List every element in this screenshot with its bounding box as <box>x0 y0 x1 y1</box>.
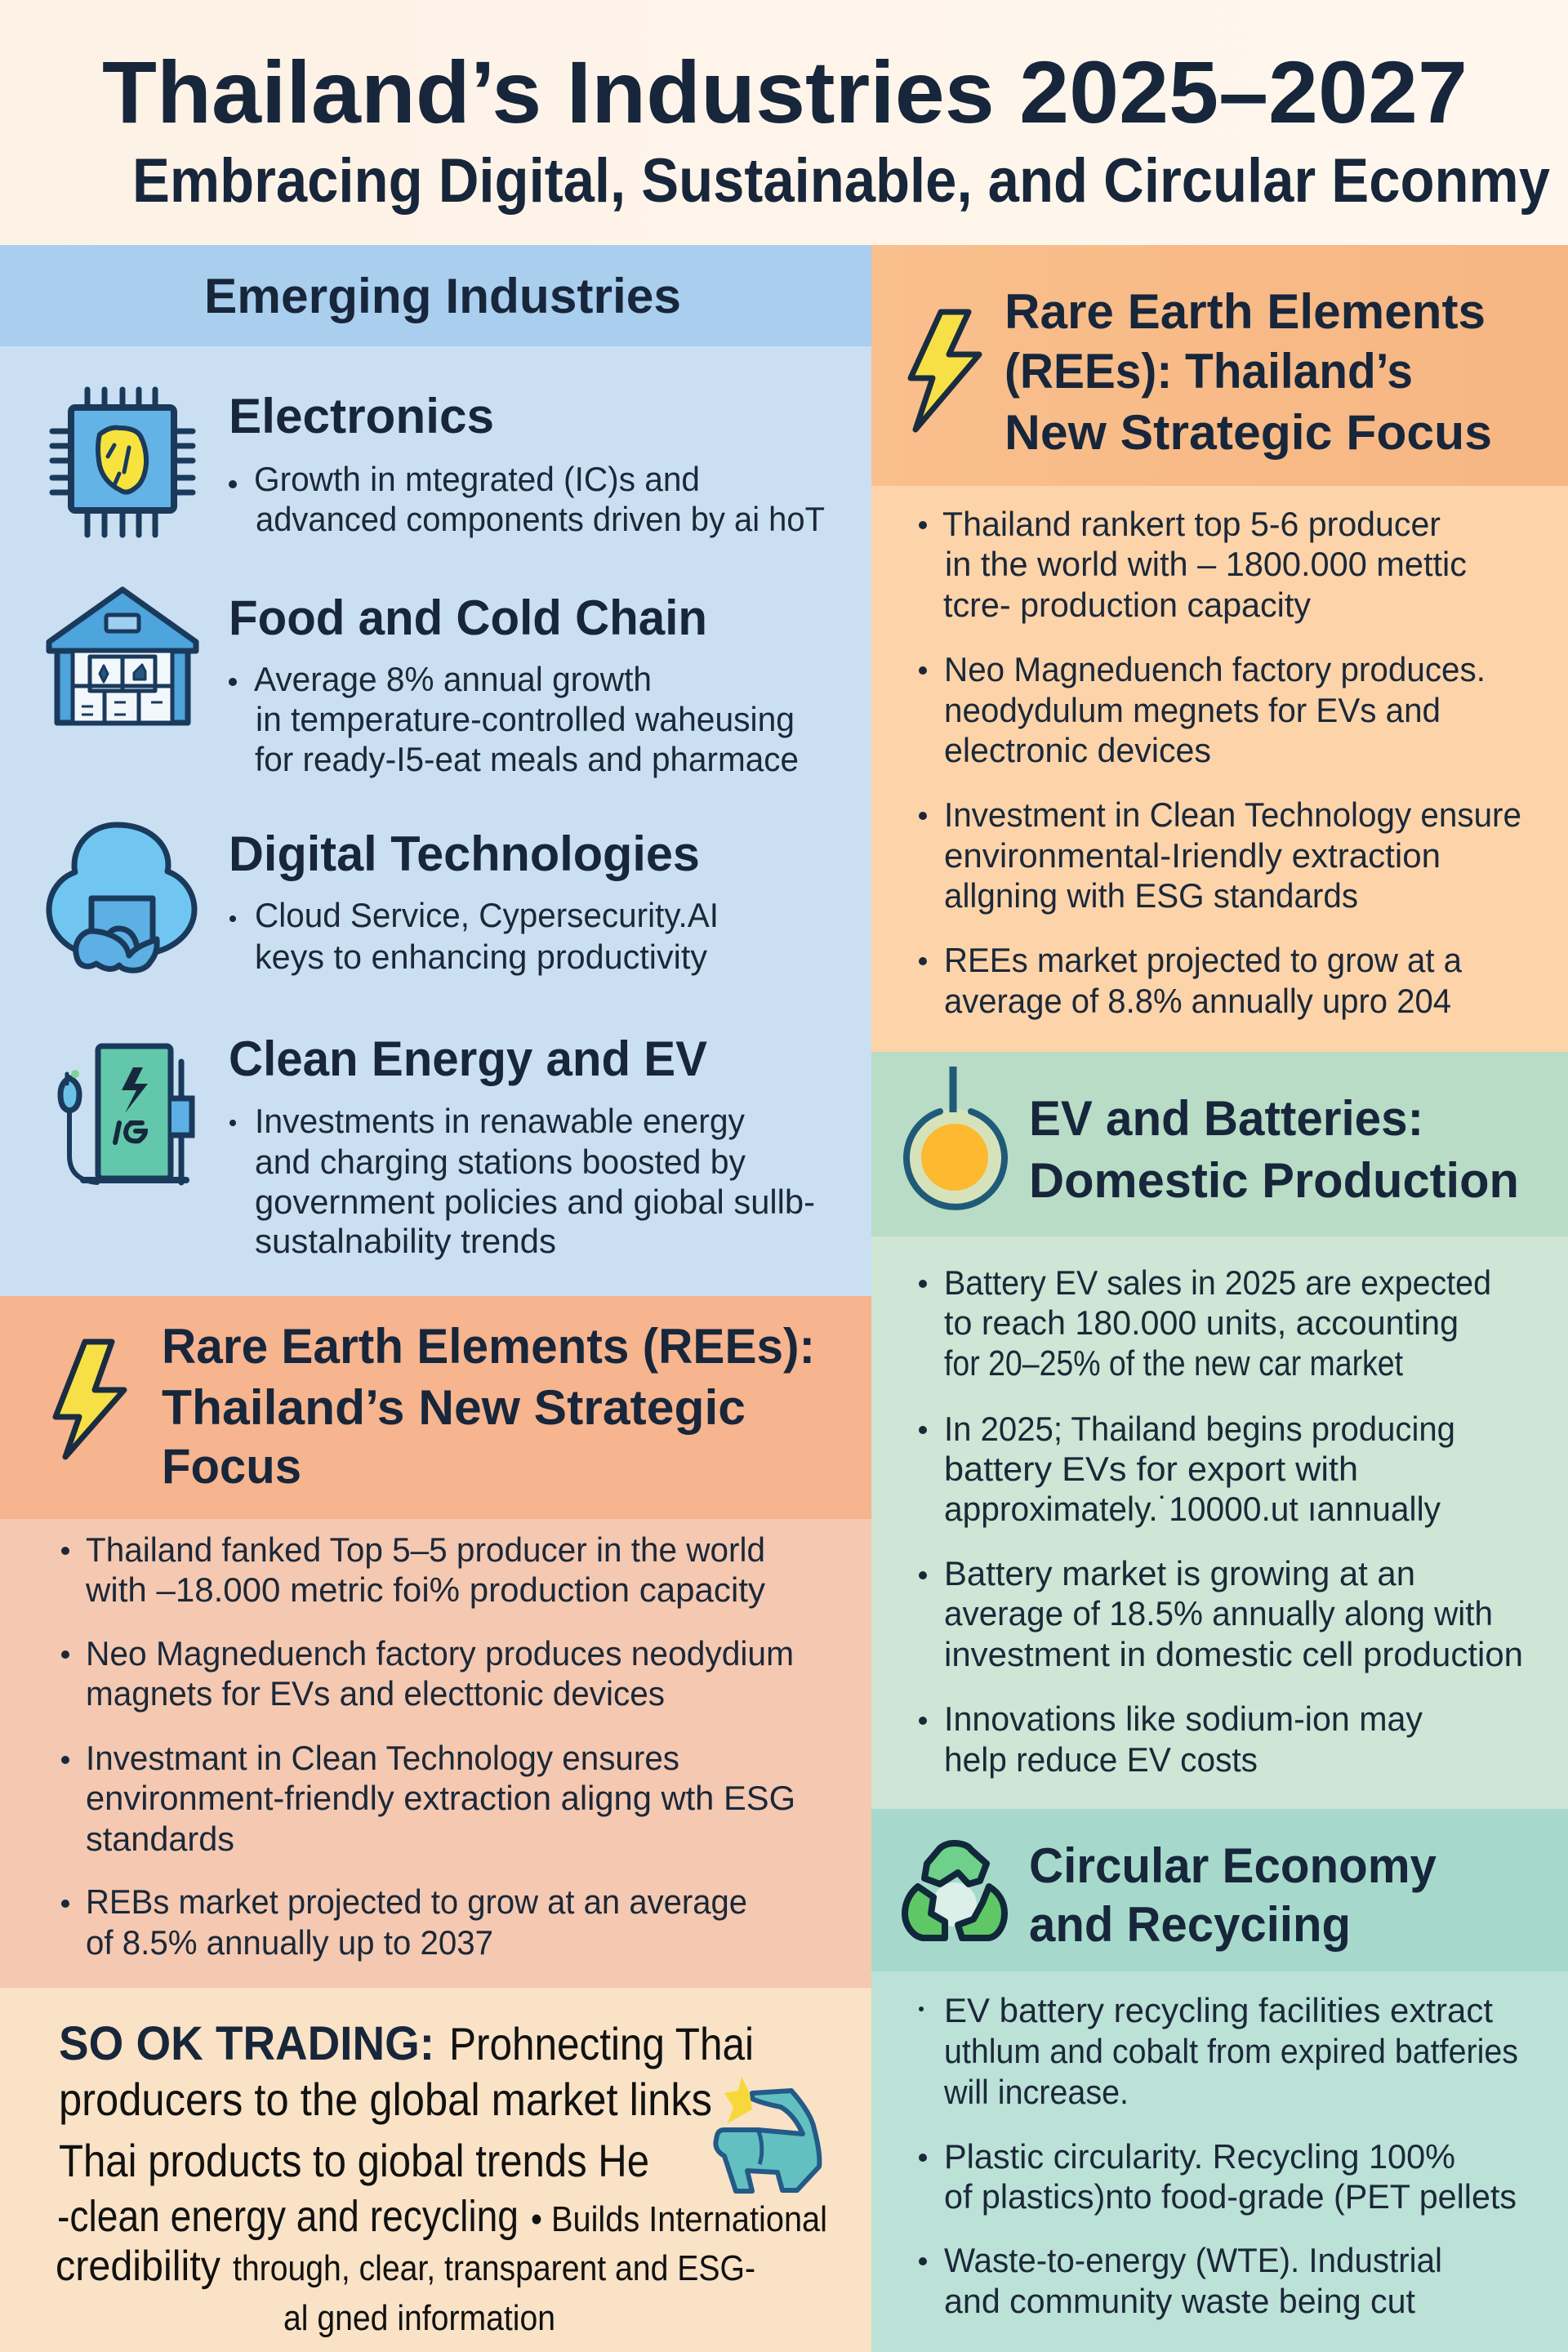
block: electronics <box>229 389 825 538</box>
bullet list: rare earth facts: allgning with ESG standards <box>944 876 1358 915</box>
block: clean energy and EV: Investments in renawable energy <box>255 1102 745 1140</box>
header banner <box>0 0 1568 245</box>
block: electronics: Growth in mtegrated (IC)s and <box>254 460 700 498</box>
bullet list: circular economy facts <box>919 1991 1518 2320</box>
bullet list: rare earth facts: Investmant in Clean Technology ensures <box>86 1739 679 1777</box>
heading: EV and batteries <box>1029 1091 1519 1208</box>
icon: battery ring <box>906 1067 1004 1207</box>
bullet list: rare earth facts: Thailand fanked Top 5–5 producer in the world <box>86 1530 765 1569</box>
heading: rare earth elements <box>1004 284 1492 460</box>
callout text: SO OK Trading: SO OK TRADING: <box>59 2017 434 2070</box>
bullet list: rare earth facts: environment-friendly extraction aligng wth ESG <box>86 1779 795 1817</box>
callout text: SO OK Trading: credibility <box>56 2243 220 2290</box>
icon: cloud and tablet <box>49 825 194 970</box>
bullet list: circular economy facts: uthlum and cobalt from expired batferies <box>944 2032 1518 2070</box>
bullet list: circular economy facts: will increase. <box>943 2073 1129 2111</box>
bullet list: rare earth facts: in the world with – 1800.000 mettic <box>945 545 1467 583</box>
bullet list: circular economy facts: Waste-to-energy (WTE). Industrial <box>944 2241 1442 2279</box>
heading: rare earth elements: (REEs): Thailand’s <box>1004 344 1413 399</box>
bullet list: EV facts: help reduce EV costs <box>944 1740 1258 1779</box>
bullet list: EV facts: average of 18.5% annually along with <box>944 1594 1493 1633</box>
bullet list: rare earth facts: tcre- production capacity <box>943 586 1311 624</box>
icon: cold storage warehouse <box>49 590 196 723</box>
block: electronics: Electronics <box>229 389 494 443</box>
callout text: SO OK Trading: • Builds International <box>531 2199 827 2239</box>
icon: microchip <box>52 390 193 535</box>
bullet list: rare earth facts: magnets for EVs and electtonic devices <box>86 1674 665 1713</box>
bullet list: rare earth facts: Thailand rankert top 5-6 producer <box>942 505 1441 543</box>
block: food and cold chain: Average 8% annual growth <box>254 660 652 698</box>
heading: circular economy: Circular Economy <box>1029 1838 1437 1893</box>
bullet list: EV facts: to reach 180.000 units, accounting <box>944 1303 1459 1342</box>
block: digital technologies <box>229 826 719 976</box>
bullet list: rare earth facts: standards <box>86 1820 234 1858</box>
bullet list: circular economy facts: Plastic circularity. Recycling 100% <box>944 2137 1455 2176</box>
panel: circular economy <box>871 1809 1568 2352</box>
callout text: SO OK Trading: Thai products to giobal trends He <box>59 2135 649 2186</box>
bullet list: circular economy facts: EV battery recycling facilities extract <box>944 1991 1493 2029</box>
heading: rare earth elements: Focus <box>162 1439 301 1494</box>
block: clean energy and EV: sustalnability trends <box>255 1222 556 1260</box>
bullet list: rare earth facts: Investment in Clean Technology ensure <box>944 795 1521 834</box>
panel: rare earth elements (right) <box>871 245 1568 1052</box>
bullet list: rare earth facts: REEs market projected to grow at a <box>944 941 1463 979</box>
bullet list: rare earth facts <box>61 1530 795 1962</box>
callout text: SO OK Trading: al gned information <box>283 2298 555 2338</box>
callout text: SO OK Trading: producers to the global market links <box>59 2074 712 2125</box>
bullet list: EV facts: approximately.˙10000.ut ıannually <box>944 1490 1441 1528</box>
bullet list: rare earth facts: average of 8.8% annually upro 204 <box>944 982 1451 1020</box>
heading: rare earth elements: Rare Earth Elements <box>1004 284 1486 339</box>
block: clean energy and EV: and charging stations boosted by <box>255 1143 746 1181</box>
bullet list: rare earth facts: Neo Magneduench factory produces neodydium <box>86 1634 794 1673</box>
bullet list: EV facts: Innovations like sodium-ion may <box>944 1699 1423 1738</box>
heading: rare earth elements: Thailand’s New Strategic <box>162 1380 746 1435</box>
bullet list: rare earth facts: of 8.5% annually up to 2037 <box>86 1923 493 1962</box>
icon: lightning bolt <box>911 312 979 430</box>
callout text: SO OK Trading <box>56 2017 827 2338</box>
icon: recycling arrows <box>905 1843 1004 1938</box>
block: food and cold chain <box>229 590 799 778</box>
icon: star and teal figure <box>715 2077 819 2191</box>
bullet list: rare earth facts: environmental-Iriendly extraction <box>944 836 1441 875</box>
block: clean energy and EV <box>229 1031 815 1260</box>
block: food and cold chain: in temperature-controlled waheusing <box>256 700 795 738</box>
bullet list: rare earth facts: electronic devices <box>944 731 1211 769</box>
callout text: SO OK Trading: Prohnecting Thai <box>449 2018 754 2069</box>
panel: EV and batteries <box>871 1052 1568 1809</box>
bullet list: circular economy facts: of plastics)nto food-grade (PET pellets <box>944 2177 1517 2216</box>
callout text: SO OK Trading: -clean energy and recycling <box>57 2192 519 2241</box>
heading: EV and batteries: EV and Batteries: <box>1029 1091 1423 1146</box>
heading: circular economy <box>1029 1838 1437 1952</box>
bullet list: rare earth facts: Neo Magneduench factory produces. <box>944 650 1486 688</box>
bullet list: rare earth facts <box>919 505 1521 1020</box>
bullet list: EV facts: Battery market is growing at an <box>944 1554 1415 1592</box>
heading: rare earth elements: Rare Earth Elements (REEs): <box>162 1319 815 1374</box>
bullet list: EV facts: investment in domestic cell production <box>944 1635 1523 1673</box>
bullet list: EV facts: battery EVs for export with <box>944 1450 1358 1488</box>
bullet list: EV facts: Battery EV sales in 2025 are expected <box>944 1263 1491 1302</box>
block: digital technologies: keys to enhancing productivity <box>255 938 707 976</box>
heading: circular economy: and Recyciing <box>1029 1897 1351 1952</box>
title: Thailand’s Industries 2025–2027 <box>102 42 1468 141</box>
block: clean energy and EV: Clean Energy and EV <box>229 1031 707 1086</box>
bullet list: rare earth facts: with –18.000 metric foi% production capacity <box>85 1570 765 1609</box>
heading: rare earth elements: New Strategic Focus <box>1004 405 1492 460</box>
bullet list: rare earth facts: REBs market projected to grow at an average <box>86 1882 747 1921</box>
callout text: SO OK Trading: through, clear, transparent and ESG- <box>233 2248 755 2288</box>
icon: EV charging station <box>60 1046 192 1183</box>
bullet list: rare earth facts: neodydulum megnets for EVs and <box>944 691 1441 729</box>
bullet list: EV facts: In 2025; Thailand begins producing <box>944 1410 1455 1448</box>
heading: EV and batteries: Domestic Production <box>1029 1153 1519 1208</box>
bullet list: EV facts <box>919 1263 1523 1779</box>
block: digital technologies: Digital Technologies <box>229 826 700 881</box>
block: electronics: advanced components driven by ai hoT <box>256 500 825 538</box>
panel: SO OK Trading <box>0 1988 871 2352</box>
bullet list: EV facts: for 20–25% of the new car market <box>944 1343 1403 1383</box>
panel: emerging industries <box>0 245 871 1296</box>
icon: lightning bolt <box>56 1342 124 1457</box>
heading: rare earth elements <box>162 1319 815 1494</box>
bullet list: circular economy facts: and community waste being cut <box>944 2282 1415 2320</box>
block: food and cold chain: Food and Cold Chain <box>229 590 707 645</box>
panel: rare earth elements (left) <box>0 1296 871 1988</box>
heading: emerging industries: Emerging Industries <box>204 269 681 323</box>
block: digital technologies: Cloud Service, Cypersecurity.AI <box>255 896 719 934</box>
block: food and cold chain: for ready-I5-eat meals and pharmace <box>255 740 799 778</box>
block: clean energy and EV: government policies and giobal sullb- <box>255 1183 815 1221</box>
